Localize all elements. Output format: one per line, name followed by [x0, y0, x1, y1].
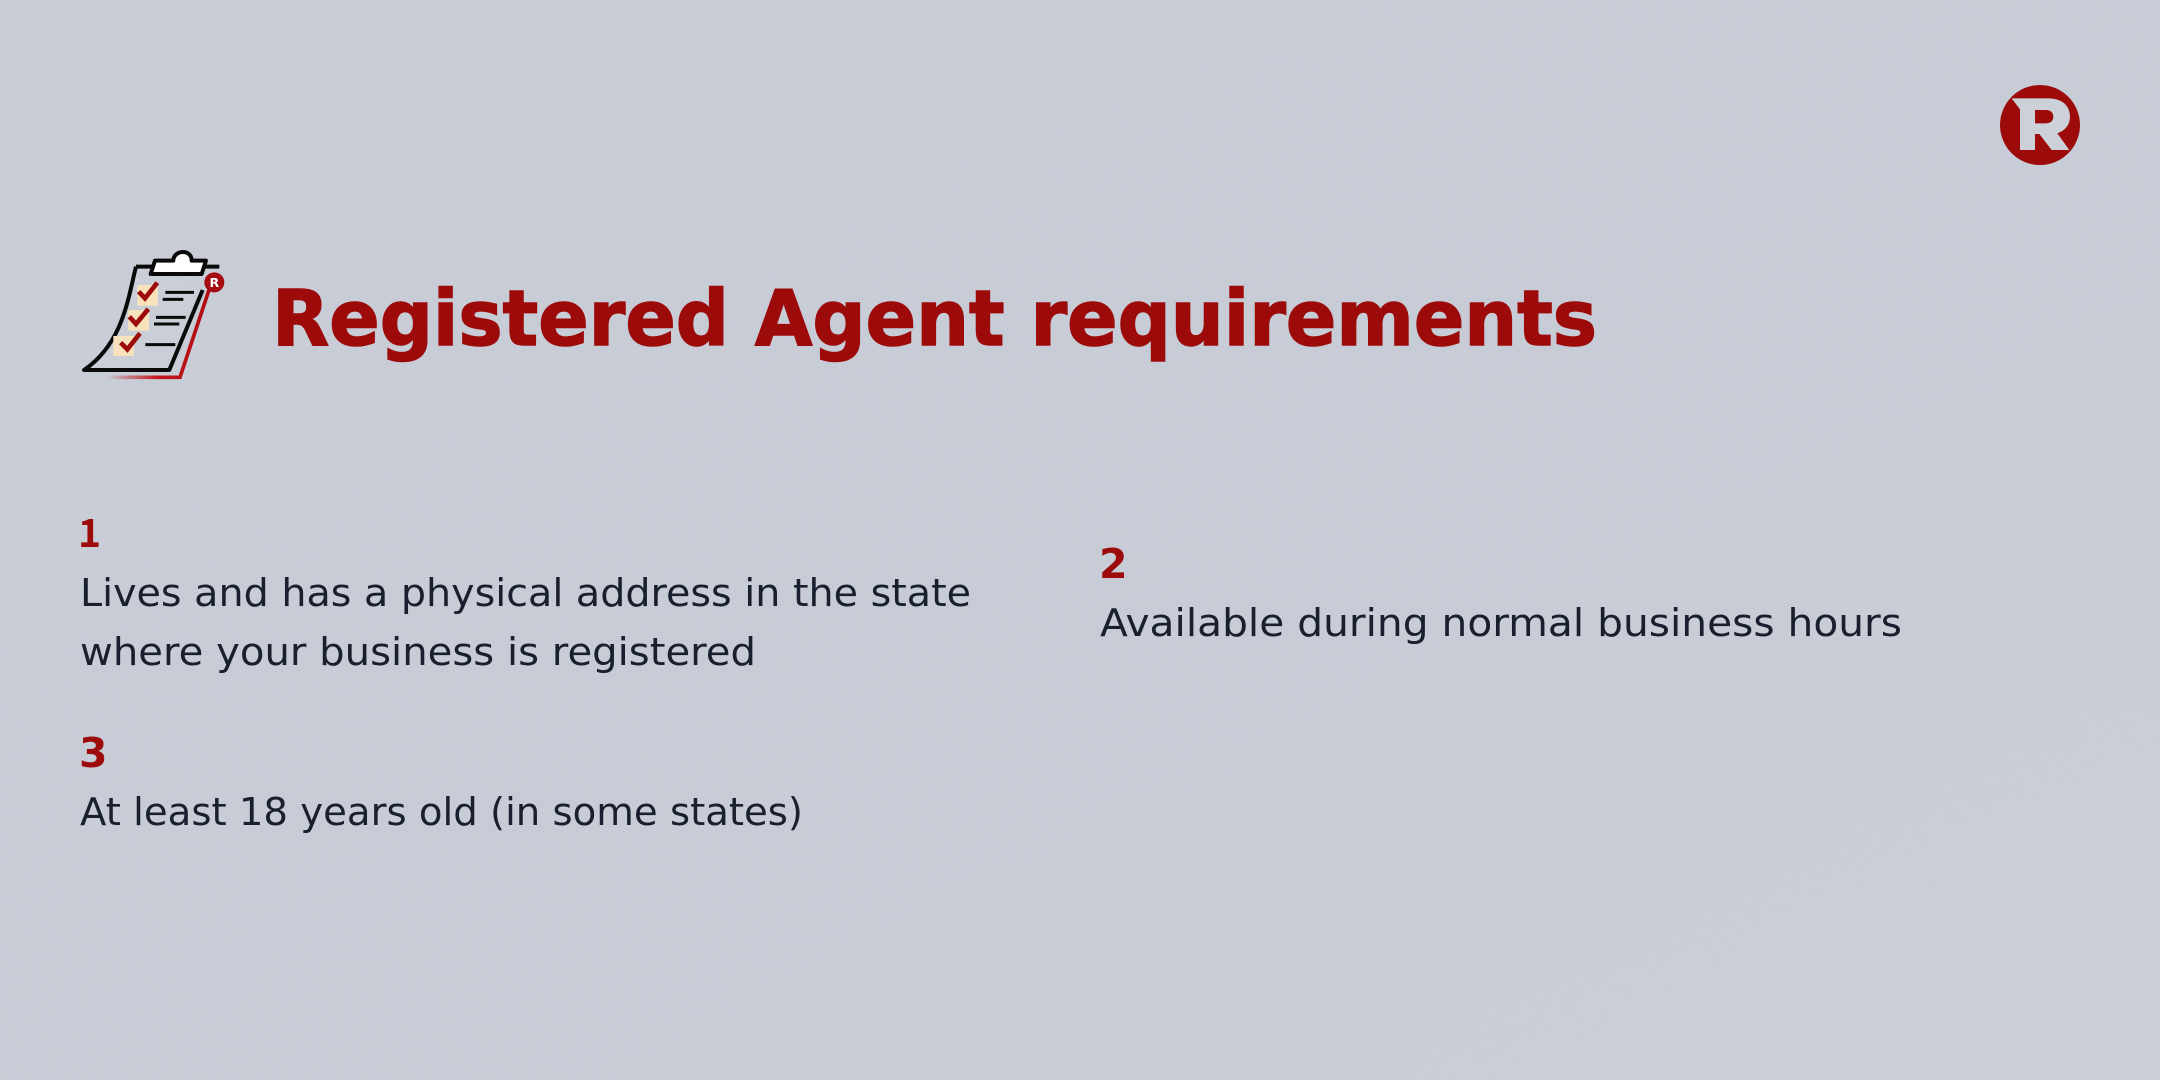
- requirement 1: where your business is registered: [80, 630, 756, 674]
- requirement 1: [78, 503, 971, 674]
- number 1: 1: [78, 503, 101, 559]
- icon check marks: [121, 283, 157, 349]
- number 3: 3: [79, 729, 108, 777]
- requirement 3 text: At least 18 years old (in some states): [80, 790, 803, 834]
- requirement 3: [79, 729, 803, 834]
- requirement 1 text: Lives and has a physical address in the state: [80, 571, 971, 615]
- requirement 2 text: Available during normal business hours: [1100, 601, 1902, 645]
- logo: R badge: [2000, 85, 2080, 165]
- requirement 2: [1099, 540, 1902, 645]
- icon clip: [151, 252, 206, 274]
- title: Registered Agent requirements: [272, 275, 1597, 364]
- icon R seal: R: [209, 275, 219, 290]
- icon list lines: [145, 292, 194, 345]
- icon: clipboard checklist: [84, 252, 224, 377]
- icon red page edge: [107, 290, 209, 377]
- icon page outline: [84, 267, 219, 370]
- icon check boxes: [113, 285, 158, 356]
- number 2: 2: [1099, 540, 1128, 588]
- icon R seal: [204, 272, 224, 292]
